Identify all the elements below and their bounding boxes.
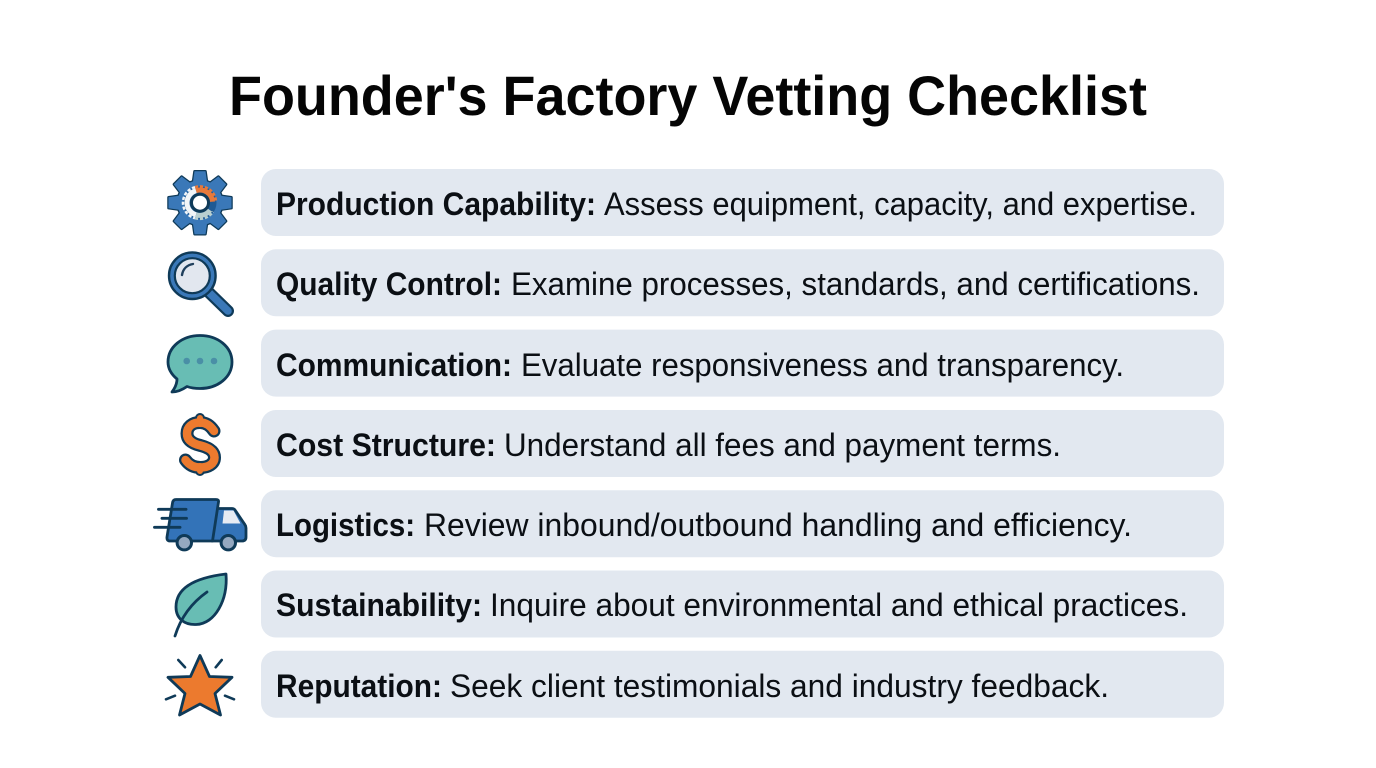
description: production capability: Assess equipment, capacity, and expertise. bbox=[604, 186, 1197, 222]
description: reputation: Seek client testimonials and industry feedback. bbox=[450, 668, 1109, 704]
description: cost structure: Understand all fees and payment terms. bbox=[504, 427, 1061, 463]
label: communication: Communication: bbox=[276, 347, 512, 383]
row: production capability bbox=[261, 169, 1224, 236]
icon: speech bubble bbox=[168, 336, 232, 392]
icon: dollar sign bbox=[186, 418, 214, 471]
label: cost structure: Cost Structure: bbox=[276, 427, 496, 463]
row: reputation bbox=[261, 651, 1224, 718]
row: cost structure bbox=[261, 410, 1224, 477]
label: production capability: Production Capability: bbox=[276, 186, 596, 222]
label: logistics: Logistics: bbox=[276, 507, 415, 543]
icon: delivery truck bbox=[154, 500, 246, 550]
description: sustainability: Inquire about environmental and ethical practices. bbox=[490, 587, 1188, 623]
label: reputation: Reputation: bbox=[276, 668, 442, 704]
icon: leaf bbox=[175, 574, 226, 636]
label: sustainability: Sustainability: bbox=[276, 587, 482, 623]
icon: star bbox=[166, 656, 234, 715]
title: Founder's Factory Vetting Checklist bbox=[229, 64, 1147, 127]
description: communication: Evaluate responsiveness and transparency. bbox=[521, 347, 1124, 383]
icon: magnifying glass bbox=[169, 252, 228, 311]
row: logistics bbox=[261, 490, 1224, 557]
description: logistics: Review inbound/outbound handling and efficiency. bbox=[424, 507, 1132, 543]
row: sustainability bbox=[261, 570, 1224, 638]
row: communication bbox=[261, 330, 1224, 397]
description: quality control: Examine processes, standards, and certifications. bbox=[511, 266, 1200, 302]
label: quality control: Quality Control: bbox=[276, 266, 502, 302]
row: quality control bbox=[261, 249, 1224, 316]
icon: gear bbox=[168, 171, 232, 234]
